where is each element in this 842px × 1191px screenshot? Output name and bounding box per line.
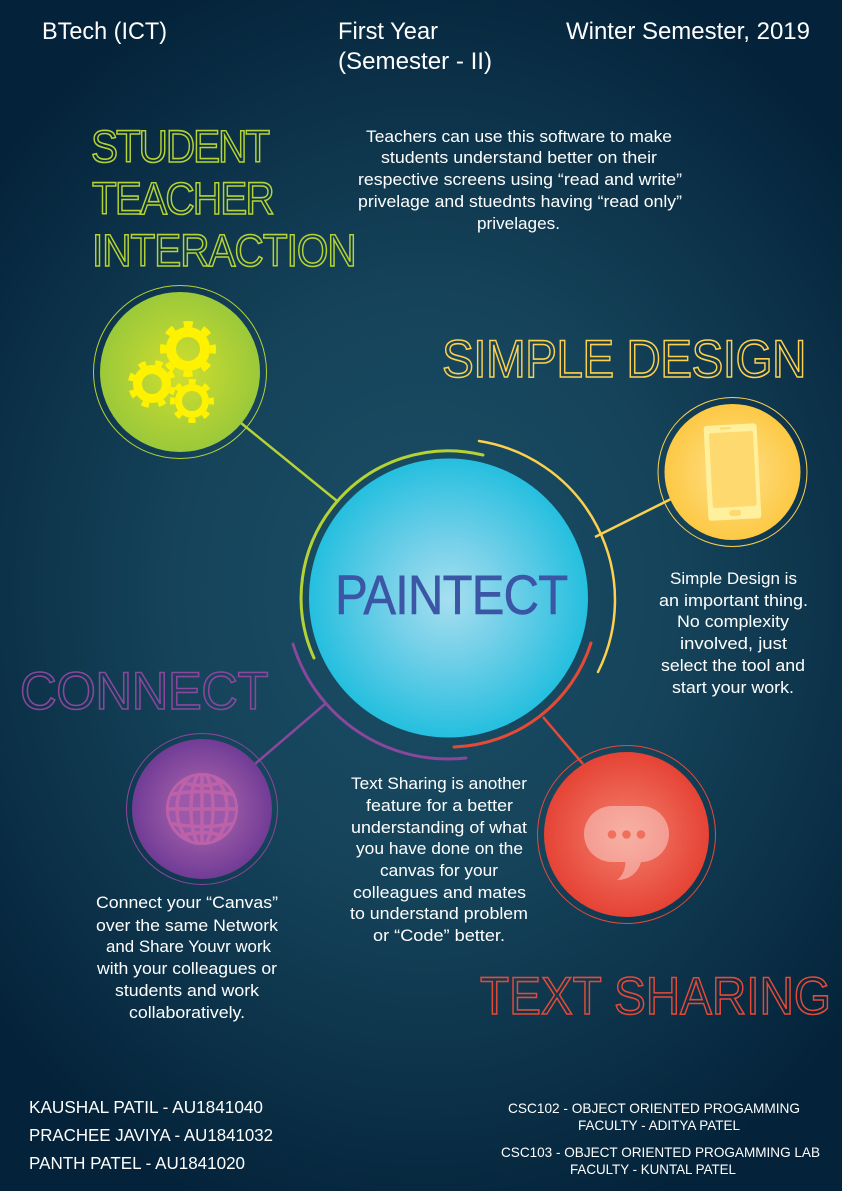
- text block: text sharing: Text Sharing is another: [351, 774, 527, 793]
- header: programme: BTech (ICT): [42, 18, 167, 45]
- connector: purple: [255, 704, 325, 764]
- arc: yellow: [479, 441, 615, 672]
- node: connect: [126, 734, 278, 884]
- node: text sharing: [538, 746, 716, 924]
- footer: course details: CSC103 - OBJECT ORIENTED PROGAMMING LAB: [501, 1144, 820, 1160]
- text block: connect: with your colleagues or: [96, 959, 277, 978]
- text block: simple design: an important thing.: [659, 591, 808, 610]
- header: year and semester: (Semester - II): [338, 48, 492, 75]
- text block: connect: Connect your “Canvas”: [96, 893, 278, 912]
- footer: team members: PANTH PATEL - AU1841020: [29, 1153, 245, 1173]
- arc: red: [454, 643, 591, 747]
- text block: student teacher interaction: privelage and stuednts having “read only”: [358, 192, 682, 211]
- icon: globe: [165, 772, 239, 846]
- text block: student teacher interaction: Teachers can use this software to make: [366, 127, 672, 146]
- text block: connect: students and work: [115, 981, 260, 1000]
- footer: team members: PRACHEE JAVIYA - AU1841032: [29, 1125, 273, 1145]
- text block: simple design: Simple Design is: [670, 569, 797, 588]
- text block: student teacher interaction: [358, 127, 682, 233]
- icon: speech bubble: [584, 806, 669, 880]
- footer: team members: [29, 1097, 273, 1173]
- text block: text sharing: to understand problem: [350, 904, 528, 923]
- central title: PAINTECT: [335, 564, 568, 627]
- heading: student teacher interaction: TEACHER: [92, 174, 275, 225]
- text block: connect: [96, 893, 279, 1022]
- text block: simple design: [659, 569, 808, 697]
- central circle: paintect: [309, 458, 588, 738]
- footer: course details: FACULTY - ADITYA PATEL: [578, 1117, 740, 1133]
- heading: student teacher interaction: STUDENT: [91, 122, 270, 173]
- text block: connect: and Share Youvr work: [106, 937, 271, 956]
- text block: simple design: select the tool and: [661, 656, 805, 675]
- text block: connect: collaboratively.: [129, 1003, 245, 1022]
- text block: student teacher interaction: privelages.: [477, 214, 560, 233]
- footer: course details: FACULTY - KUNTAL PATEL: [570, 1161, 736, 1177]
- icon: phone: [704, 423, 761, 521]
- header: term: Winter Semester, 2019: [566, 18, 810, 45]
- text block: simple design: No complexity: [677, 612, 790, 631]
- footer: course details: CSC102 - OBJECT ORIENTED PROGAMMING: [508, 1100, 800, 1116]
- text block: student teacher interaction: respective screens using “read and write”: [358, 170, 682, 189]
- heading: connect: CONNECT: [20, 662, 269, 721]
- connector: red: [543, 717, 583, 764]
- text block: text sharing: or “Code” better.: [373, 926, 505, 945]
- text block: text sharing: colleagues and mates: [353, 883, 526, 902]
- arc: purple: [293, 644, 466, 759]
- text block: simple design: start your work.: [672, 678, 794, 697]
- node: simple design: [658, 398, 807, 546]
- text block: text sharing: you have done on the: [356, 839, 523, 858]
- footer: course details: [501, 1100, 820, 1177]
- header: year and semester: First Year: [338, 18, 438, 45]
- header: year and semester: [338, 18, 492, 75]
- text block: text sharing: understanding of what: [351, 818, 527, 837]
- heading: simple design: SIMPLE DESIGN: [442, 329, 807, 389]
- connector: yellow: [595, 499, 671, 537]
- heading: text sharing: TEXT SHARING: [480, 966, 831, 1026]
- text block: text sharing: feature for a better: [366, 796, 513, 815]
- arc: green: [301, 451, 483, 658]
- footer: team members: KAUSHAL PATIL - AU1841040: [29, 1097, 263, 1117]
- icon: gears: [125, 324, 213, 420]
- connector: green: [241, 423, 337, 501]
- text block: text sharing: canvas for your: [380, 861, 498, 880]
- heading: student teacher interaction: INTERACTION: [92, 226, 357, 277]
- heading: student teacher interaction: [91, 122, 357, 277]
- text block: connect: over the same Network: [96, 916, 279, 935]
- text block: student teacher interaction: students understand better on their: [381, 148, 657, 167]
- text block: text sharing: [350, 774, 528, 945]
- node: student teacher interaction: [94, 286, 266, 458]
- text block: simple design: involved, just: [680, 634, 787, 653]
